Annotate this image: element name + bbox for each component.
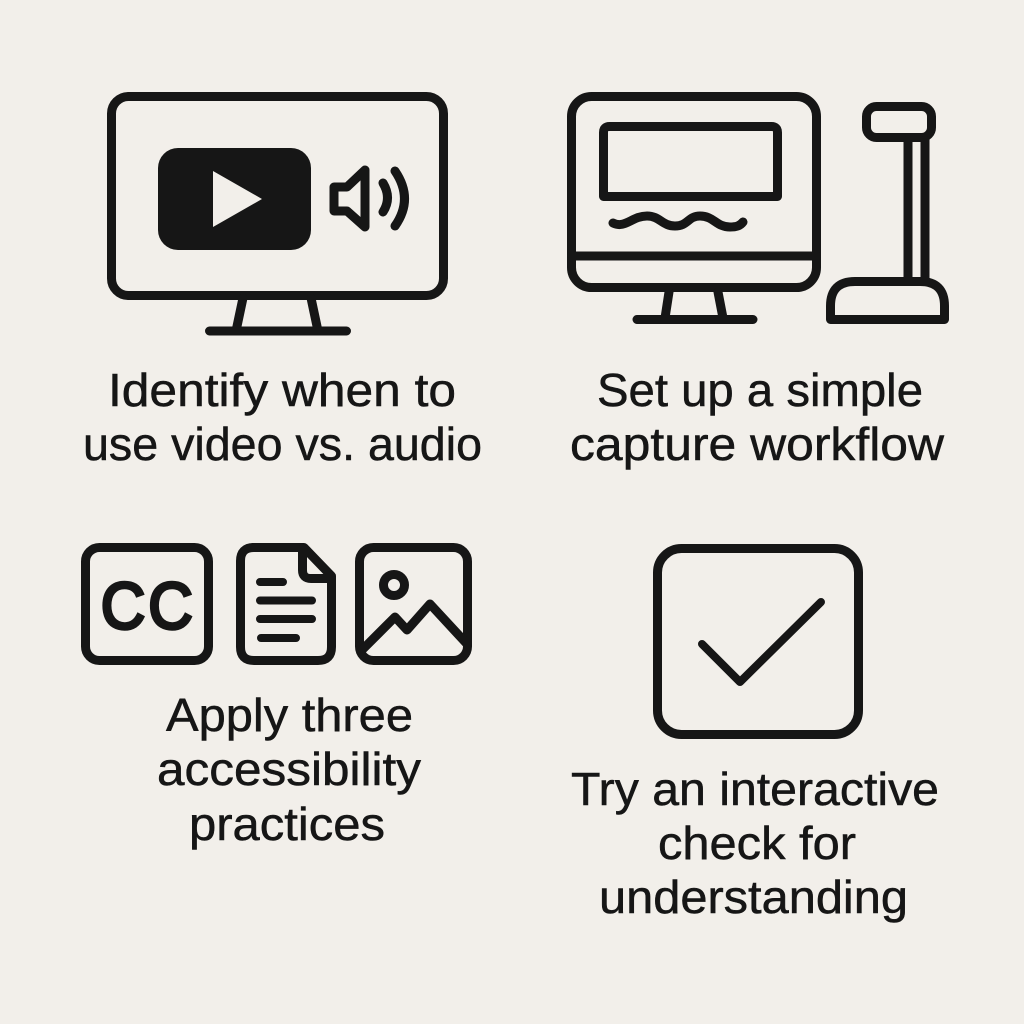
icon: computer and microphone <box>572 96 944 320</box>
heading: interactive check: Try an interactive <box>571 763 939 815</box>
icon: closed captions: CC <box>101 568 193 643</box>
panel: video vs audio <box>83 96 482 470</box>
icon: document <box>240 548 332 660</box>
icon: checkbox <box>658 548 858 734</box>
panel: accessibility <box>86 548 468 850</box>
heading: interactive check: understanding <box>599 871 908 923</box>
heading: video vs audio: Identify when to <box>108 364 456 416</box>
heading: video vs audio: use video vs. audio <box>83 418 482 470</box>
heading: interactive check: check for <box>658 817 856 869</box>
icon: monitor with video and speaker <box>112 96 444 331</box>
icon: closed captions <box>86 548 208 660</box>
panel: interactive check <box>571 548 939 923</box>
heading: accessibility: practices <box>189 798 385 850</box>
heading: accessibility <box>157 689 421 850</box>
heading: capture workflow: Set up a simple <box>597 364 923 416</box>
heading: accessibility: Apply three <box>166 689 413 741</box>
heading: video vs audio <box>83 364 482 470</box>
icon: image <box>360 548 468 660</box>
heading: interactive check <box>571 763 939 923</box>
panel: capture workflow <box>570 96 945 470</box>
heading: capture workflow <box>570 364 945 470</box>
heading: accessibility: accessibility <box>157 743 421 795</box>
heading: capture workflow: capture workflow <box>570 418 945 470</box>
